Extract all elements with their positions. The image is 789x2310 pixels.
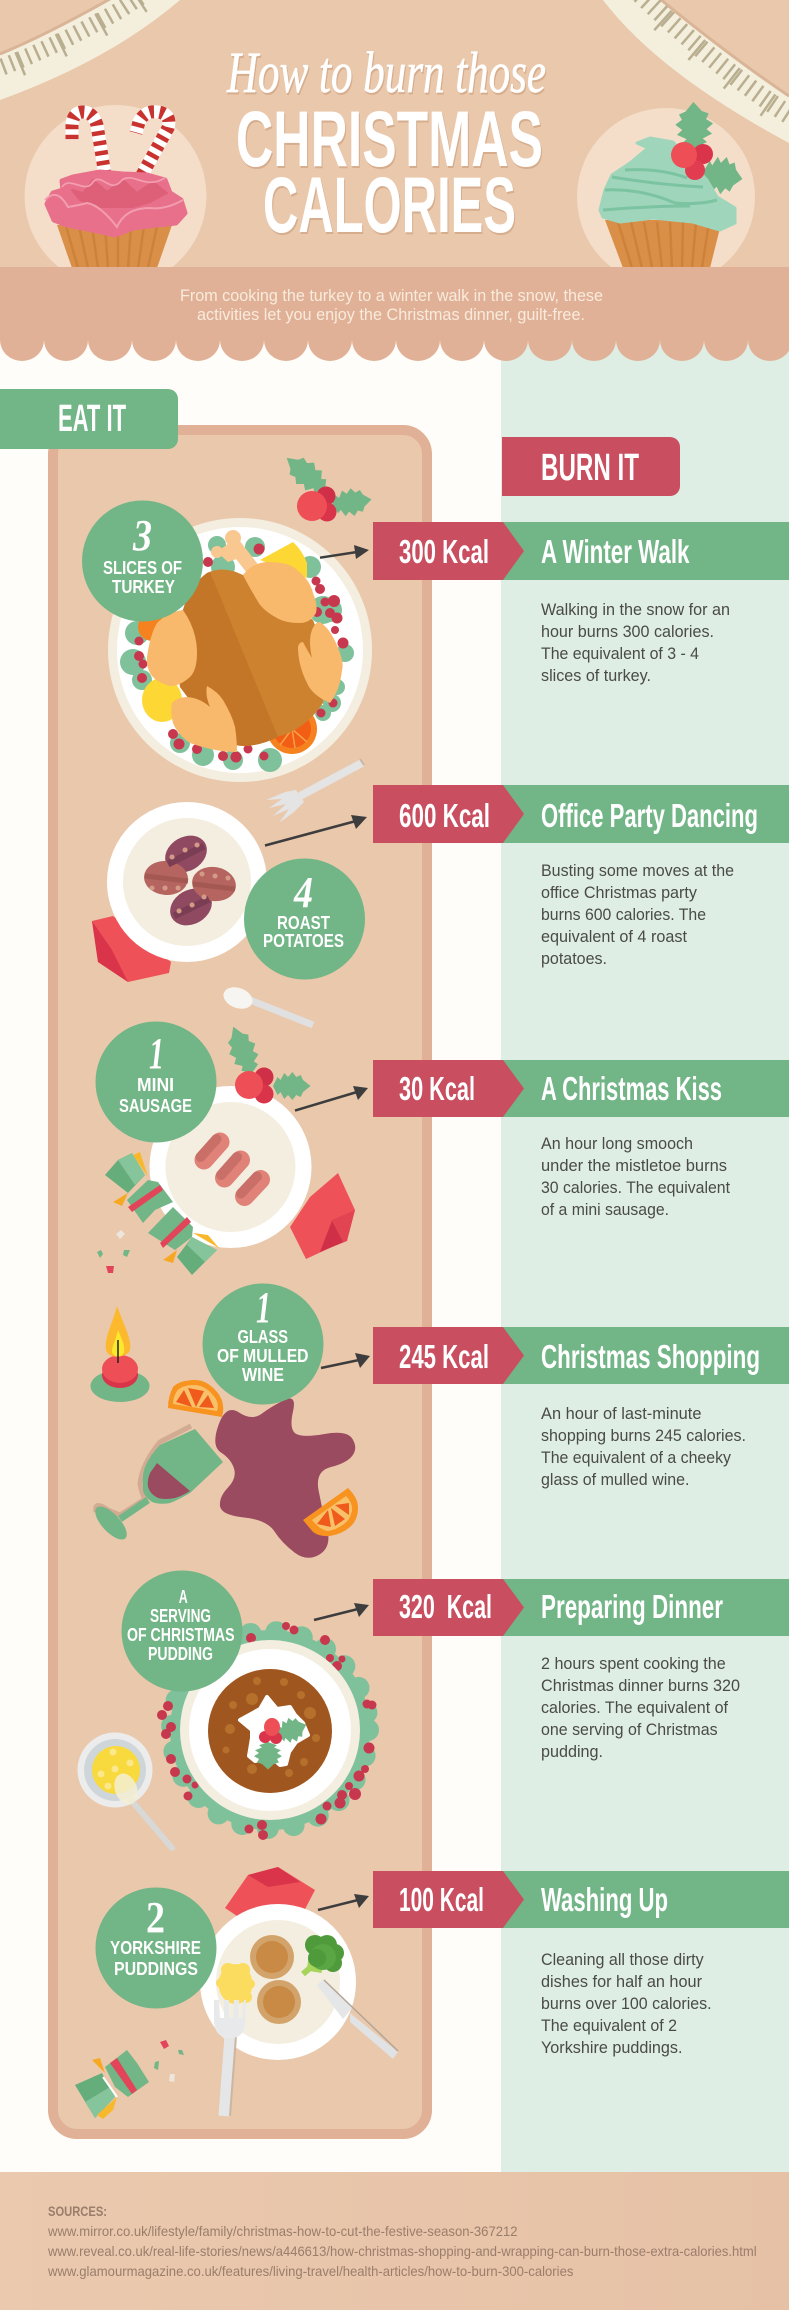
row: christmas shopping: An hour of last-minute <box>541 1404 702 1423</box>
icon: red gift <box>225 1867 315 1918</box>
bubble: 2 yorkshire puddings <box>96 1888 216 2008</box>
bubble: 3 slices of turkey: SLICES OF <box>103 558 182 578</box>
broccoli <box>303 1955 322 1974</box>
row: a christmas kiss: under the mistletoe burns <box>541 1156 727 1175</box>
bubble: 1 glass of mulled wine <box>202 1283 324 1404</box>
row: washing up: Washing Up <box>541 1881 668 1918</box>
illustration: sausages <box>97 1021 355 1275</box>
mash <box>216 1963 255 2004</box>
row: office party dancing: potatoes. <box>541 949 607 968</box>
bubble: a serving of christmas pudding: SERVING <box>150 1606 211 1626</box>
row: preparing dinner: one serving of Christmas <box>541 1720 718 1739</box>
bubble: a serving of christmas pudding <box>122 1570 242 1692</box>
footer: sources: www.mirror.co.uk/lifestyle/family/christmas-how-to-cut-the-festive-season-367212 <box>47 2223 518 2239</box>
icon: holly <box>220 1021 310 1104</box>
row: christmas shopping: shopping burns 245 calories. <box>541 1426 746 1445</box>
illustration: turkey platter <box>108 447 374 782</box>
arrow 2 <box>265 815 367 846</box>
row: washing up: dishes for half an hour <box>541 1972 702 1991</box>
row: a winter walk: hour burns 300 calories. <box>541 622 714 641</box>
row: washing up <box>373 1871 789 2057</box>
icon: cracker <box>105 1152 219 1275</box>
footer: sources <box>0 2172 789 2310</box>
icon: holly <box>278 447 374 522</box>
row: preparing dinner: 2 hours spent cooking the <box>541 1654 726 1673</box>
bubble: 1 mini sausage <box>96 1022 216 1142</box>
title: CHRISTMAS <box>236 94 543 183</box>
illustration: mulled wine spill <box>90 1380 358 1558</box>
row: a winter walk: slices of turkey. <box>541 666 651 685</box>
bubble: 4 roast potatoes <box>244 858 365 980</box>
spill <box>215 1398 355 1558</box>
row: office party dancing <box>373 785 789 968</box>
bubble: 1 glass of mulled wine: GLASS <box>238 1327 288 1347</box>
icon: holly cupcake <box>577 101 755 286</box>
bubble: 1 mini sausage: MINI <box>137 1075 174 1095</box>
row: office party dancing: equivalent of 4 roast <box>541 927 687 946</box>
row: preparing dinner <box>373 1579 789 1761</box>
row: office party dancing: 600 Kcal <box>399 797 490 834</box>
row: preparing dinner: calories. The equivalent of <box>541 1698 728 1717</box>
row: washing up: The equivalent of 2 <box>541 2016 677 2035</box>
row: washing up: Yorkshire puddings. <box>541 2038 682 2057</box>
title <box>226 40 546 249</box>
bubble: 1 glass of mulled wine: WINE <box>242 1365 284 1385</box>
row: office party dancing: Busting some moves at the <box>541 861 734 880</box>
row: christmas shopping <box>373 1327 789 1489</box>
row: a christmas kiss: 30 calories. The equivalent <box>541 1178 730 1197</box>
icon: custard bowl and spoon <box>78 1732 172 1848</box>
row: christmas shopping: glass of mulled wine. <box>541 1470 690 1489</box>
icon: confetti <box>97 1230 130 1273</box>
arrow 1 <box>320 545 369 559</box>
bubble: a serving of christmas pudding: A <box>179 1587 188 1607</box>
row: office party dancing: burns 600 calories. The <box>541 905 706 924</box>
arrow 4 <box>321 1353 370 1368</box>
bubble: 3 slices of turkey <box>82 500 203 622</box>
row: a christmas kiss <box>373 1060 789 1219</box>
illustration: yorkshire puddings <box>200 1867 398 2116</box>
panel: tray <box>53 430 427 2134</box>
tab: eat it: EAT IT <box>58 398 126 440</box>
panel: burn it background <box>501 340 789 2172</box>
bubble: 2 yorkshire puddings: 2 <box>146 1893 165 1942</box>
row: a christmas kiss: of a mini sausage. <box>541 1200 669 1219</box>
footer: sources: SOURCES: <box>48 2203 107 2219</box>
lettuce <box>120 536 354 772</box>
intro band: activities let you enjoy the Christmas dinner, guilt-free. <box>197 305 585 324</box>
fork <box>214 2000 246 2116</box>
knife <box>317 1980 398 2059</box>
bubble: 1 glass of mulled wine: 1 <box>256 1283 271 1332</box>
icon: candy cane cupcake <box>24 105 206 287</box>
tab: burn it <box>502 437 680 496</box>
intro band: From cooking the turkey to a winter walk in the snow, these <box>180 286 603 305</box>
row: a winter walk <box>373 522 789 685</box>
icon: fork <box>266 759 364 823</box>
row: preparing dinner: 320 Kcal <box>399 1588 492 1625</box>
intro band <box>0 267 789 361</box>
bubble: 3 slices of turkey: TURKEY <box>112 577 175 597</box>
arrow 6 <box>318 1894 369 1910</box>
bubble: 4 roast potatoes: POTATOES <box>263 931 344 951</box>
row: a christmas kiss: An hour long smooch <box>541 1134 693 1153</box>
arrow 5 <box>314 1603 369 1620</box>
row: a christmas kiss: 30 Kcal <box>399 1070 475 1107</box>
bubble: 2 yorkshire puddings: PUDDINGS <box>114 1959 198 1979</box>
row: washing up: 100 Kcal <box>399 1881 484 1918</box>
row: washing up: Cleaning all those dirty <box>541 1950 704 1969</box>
arrow 3 <box>295 1086 368 1111</box>
row: christmas shopping: The equivalent of a cheeky <box>541 1448 731 1467</box>
row: preparing dinner: pudding. <box>541 1742 603 1761</box>
icon: wine glass <box>90 1426 223 1544</box>
row: a winter walk: A Winter Walk <box>541 533 690 570</box>
row: a winter walk: 300 Kcal <box>399 533 489 570</box>
row: washing up: burns over 100 calories. <box>541 1994 712 2013</box>
footer: sources: www.glamourmagazine.co.uk/features/living-travel/health-articles/how-to-burn-300-calories <box>47 2263 573 2279</box>
illustration: roast potatoes <box>92 802 267 982</box>
icon: orange slice <box>303 1488 358 1536</box>
berries <box>134 544 348 762</box>
header <box>0 0 789 361</box>
bubble: 2 yorkshire puddings: YORKSHIRE <box>110 1938 201 1958</box>
tape measure right <box>603 0 789 143</box>
bubble: a serving of christmas pudding: PUDDING <box>148 1644 213 1664</box>
title: CALORIES <box>263 160 516 249</box>
icon: red gift <box>92 916 171 982</box>
icon: red gift <box>290 1173 355 1259</box>
bubble: 4 roast potatoes: ROAST <box>277 913 330 933</box>
tab: eat it <box>0 389 178 449</box>
icon: cracker <box>75 2040 184 2119</box>
tape measure left <box>0 0 180 100</box>
illustration: christmas pudding <box>157 1622 376 1840</box>
bubble: 4 roast potatoes: 4 <box>293 868 313 917</box>
tab: burn it: BURN IT <box>541 447 639 489</box>
bubble: a serving of christmas pudding: OF CHRISTMAS <box>127 1625 234 1645</box>
bubble: 1 mini sausage: 1 <box>149 1029 164 1078</box>
row: christmas shopping: 245 Kcal <box>399 1338 489 1375</box>
row: preparing dinner: Christmas dinner burns 320 <box>541 1676 740 1695</box>
title: How to burn those <box>226 40 546 105</box>
row: a winter walk: Walking in the snow for an <box>541 600 730 619</box>
row: a winter walk: The equivalent of 3 - 4 <box>541 644 699 663</box>
icon: spoon <box>220 983 313 1025</box>
icon: candle <box>90 1306 150 1402</box>
row: office party dancing: office Christmas party <box>541 883 697 902</box>
footer: sources: www.reveal.co.uk/real-life-stories/news/a446613/how-christmas-shopping-and-wrapping-can-burn-those-extra-calories.html <box>47 2243 757 2259</box>
icon: orange slice <box>168 1380 223 1417</box>
bubble: 1 mini sausage: SAUSAGE <box>119 1096 192 1116</box>
bubble: 3 slices of turkey: 3 <box>132 511 152 560</box>
bubble: 1 glass of mulled wine: OF MULLED <box>217 1346 308 1366</box>
